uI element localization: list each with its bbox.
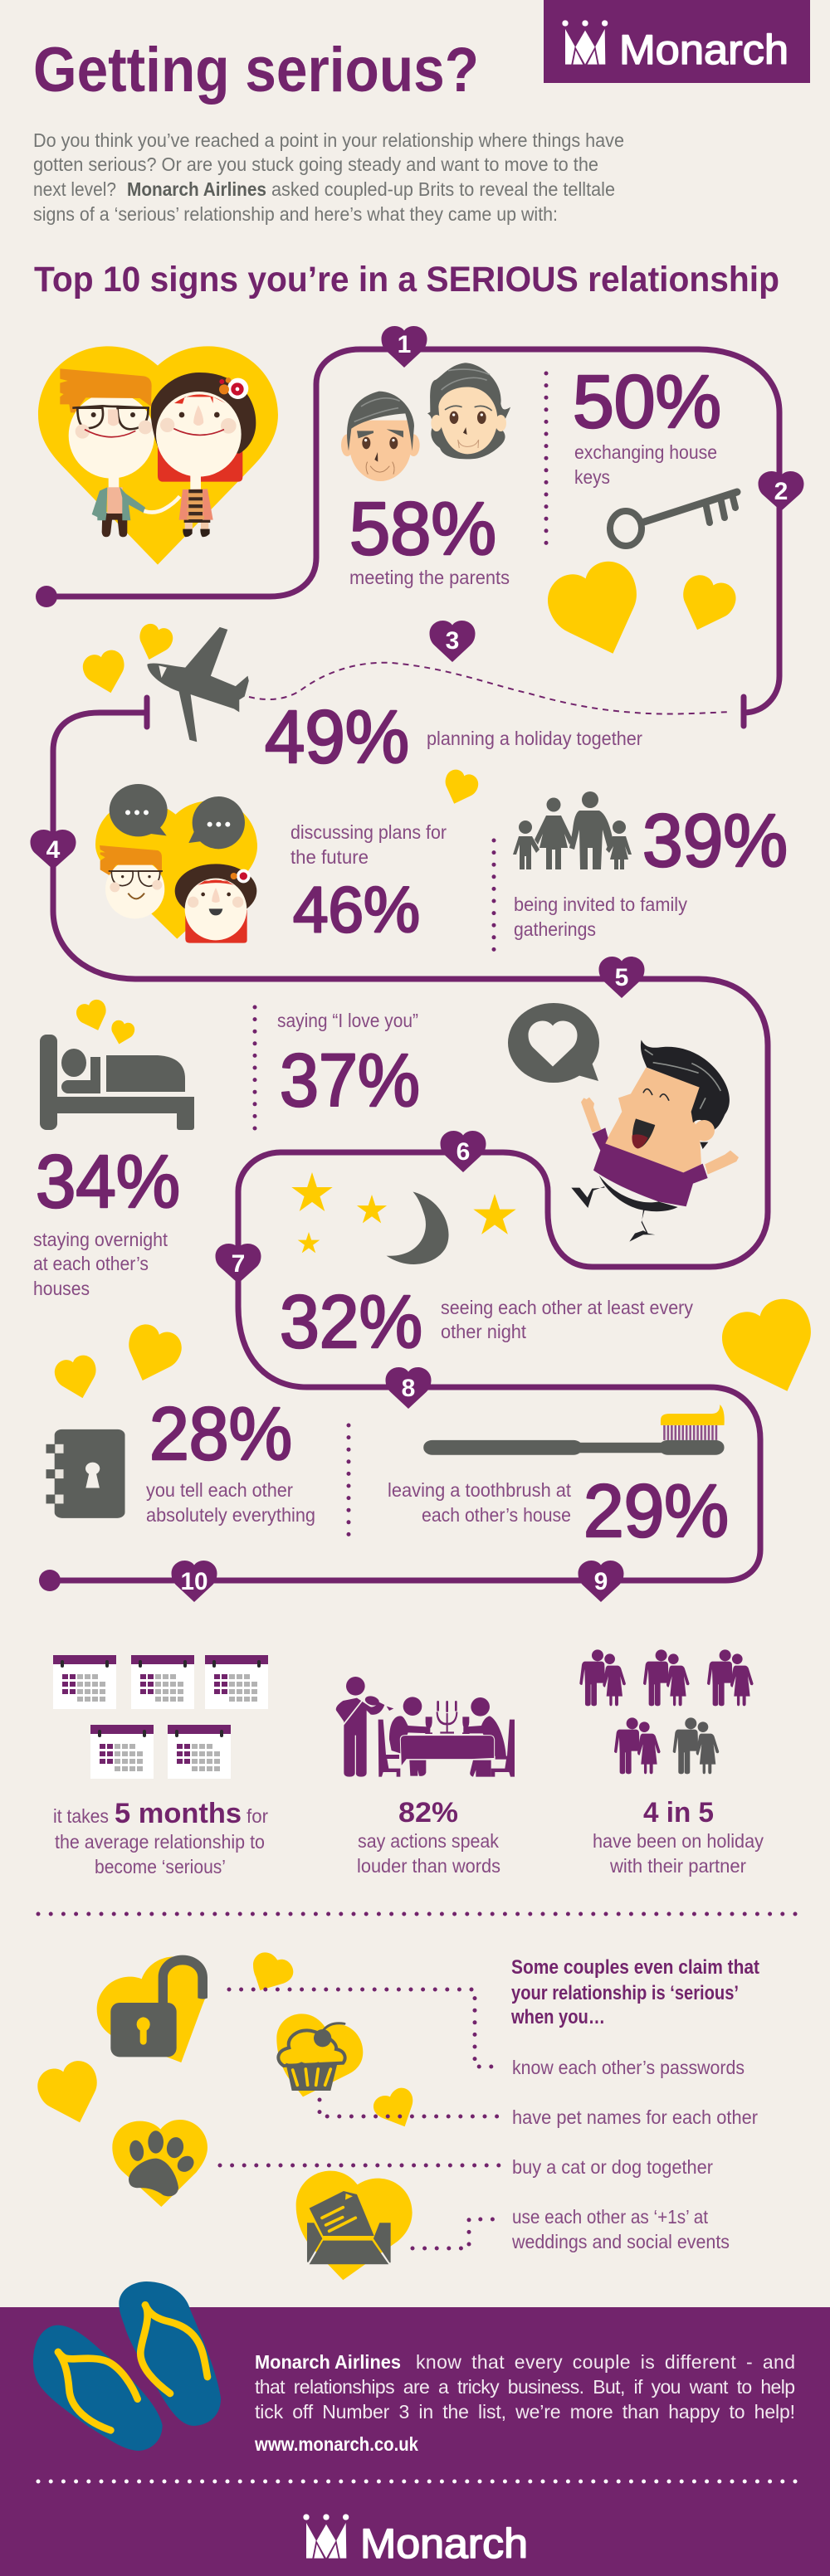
stat 5 months: the average relationship to (55, 1831, 265, 1853)
header logo: Monarch (619, 27, 788, 73)
heart marker 3 (430, 621, 475, 662)
yellow hearts near plane (80, 621, 176, 699)
stat 29% toothbrush: 29% (583, 1470, 729, 1553)
icon: notebook (46, 1429, 125, 1518)
intro text: next level? (33, 178, 116, 200)
illustration: couple in heart (38, 346, 278, 565)
heart marker 10 (171, 1561, 217, 1602)
intro text (33, 129, 624, 225)
divider dots (544, 373, 548, 551)
list items: have pet names for each other (512, 2106, 758, 2128)
list heading: your relationship is ‘serious’ (511, 1982, 739, 2004)
stat 46% discussing plans: 46% (293, 873, 420, 946)
yellow heart (438, 767, 481, 810)
heart marker 4: 4 (46, 836, 61, 864)
footer logo: Monarch (360, 2520, 528, 2567)
footer text: tick off Number 3 in the list, we’re more than happy to help! (255, 2401, 795, 2423)
intro text: gotten serious? Or are you stuck going steady and want to move to the (33, 153, 598, 175)
list items: use each other as ‘+1s’ at (512, 2206, 709, 2228)
icon: envelope on heart (296, 2171, 413, 2280)
stat 32% seeing each other (280, 1281, 693, 1364)
stat 32% seeing each other: 32% (280, 1281, 422, 1364)
list items: weddings and social events (511, 2231, 730, 2252)
footer text (254, 2351, 795, 2455)
yellow heart (253, 1952, 293, 1990)
heart marker 1: 1 (398, 331, 411, 358)
stat 4 in 5: 4 in 5 (643, 1797, 714, 1829)
intro text: Do you think you’ve reached a point in your relationship where things have (33, 129, 624, 151)
heart marker 5 (599, 957, 644, 998)
stat 50% exchanging house keys: exchanging house (574, 441, 717, 463)
heart marker 4 (30, 830, 76, 869)
subheading: Top 10 signs you’re in a SERIOUS relationship (34, 260, 779, 299)
stat 34% staying overnight: houses (33, 1278, 90, 1299)
heart marker 10: 10 (181, 1568, 208, 1595)
stat 49% planning a holiday: planning a holiday together (427, 728, 642, 749)
stat 29% toothbrush: each other’s house (422, 1504, 571, 1526)
illustration: jumping man (571, 1040, 739, 1242)
heart marker 8: 8 (402, 1375, 415, 1402)
heart marker 1 (382, 326, 427, 368)
list heading: when you… (510, 2006, 605, 2028)
stat 28% tell each other: absolutely everything (146, 1504, 315, 1526)
stat 39% family gatherings: 39% (642, 800, 788, 883)
stat 37% saying I love you (277, 1010, 420, 1122)
stat 28% tell each other: you tell each other (146, 1479, 293, 1501)
stat 37% saying I love you: saying “I love you” (277, 1010, 418, 1031)
heart marker 6 (440, 1131, 486, 1172)
stat 50% exchanging house keys: 50% (573, 361, 721, 444)
yellow hearts (51, 1292, 829, 1406)
stat 5 months (53, 1798, 268, 1877)
footer text: that relationships are a tricky business. But, if you want to help (255, 2376, 795, 2398)
stat 5 months: it takes (53, 1805, 109, 1827)
illustration: parents (341, 363, 510, 481)
stat 4 in 5 (593, 1797, 764, 1877)
footer panel (0, 2307, 830, 2576)
hearts and icons group (97, 1952, 413, 2280)
footer text: know that every couple is different - and (416, 2351, 795, 2373)
heart marker 5: 5 (615, 964, 628, 991)
list items (511, 2057, 758, 2252)
intro text: signs of a ‘serious’ relationship and here’s what they came up with: (33, 203, 558, 225)
stat 46% discussing plans: the future (290, 846, 369, 868)
list heading: Some couples even claim that (511, 1956, 759, 1979)
route end dot (39, 1570, 61, 1591)
icon: padlock on heart (97, 1955, 208, 2062)
list items: know each other’s passwords (512, 2057, 745, 2078)
stat 46% discussing plans (290, 821, 447, 946)
icon: key (610, 492, 737, 546)
stat 4 in 5: have been on holiday (593, 1830, 764, 1852)
stat 5 months: for (247, 1805, 268, 1827)
stat 39% family gatherings (514, 800, 788, 940)
heart marker 7 (216, 1244, 261, 1283)
stat 37% saying I love you: 37% (280, 1040, 420, 1122)
route line middle and lower (50, 698, 768, 1580)
stat 34% staying overnight (33, 1141, 180, 1299)
footer logo (303, 2514, 528, 2567)
title: Getting serious? (33, 35, 479, 105)
illustration: couple talking (95, 784, 257, 943)
route line upper (46, 349, 779, 726)
stat 29% toothbrush (388, 1470, 729, 1553)
icon: five calendars (53, 1655, 268, 1779)
stat 34% staying overnight: 34% (36, 1141, 180, 1224)
stat 39% family gatherings: gatherings (514, 918, 596, 940)
icon: plane (147, 627, 249, 742)
heart marker 9: 9 (594, 1568, 608, 1595)
stat 28% tell each other: 28% (149, 1393, 292, 1476)
stat 5 months: 5 months (115, 1798, 242, 1829)
heart marker 9 (578, 1561, 624, 1602)
stat 82%: louder than words (357, 1855, 500, 1877)
stat 29% toothbrush: leaving a toothbrush at (388, 1479, 572, 1501)
stat 32% seeing each other: seeing each other at least every (441, 1297, 693, 1318)
heart marker 7: 7 (232, 1250, 245, 1278)
heart marker 2 (759, 471, 803, 511)
intro text: asked coupled-up Brits to reveal the telltale (271, 178, 615, 200)
heart marker 3: 3 (446, 627, 459, 655)
icon: toothbrush (423, 1405, 725, 1455)
stat 82% (357, 1797, 500, 1877)
icon: bed (40, 1035, 194, 1130)
yellow hearts above bed (74, 997, 136, 1047)
icon: five couples, one grey (579, 1649, 754, 1774)
heart marker 6: 6 (456, 1138, 470, 1166)
stars and moon (291, 1172, 516, 1264)
icon: cupcake on heart (276, 2014, 363, 2096)
route start dot (36, 586, 57, 607)
list heading (510, 1956, 759, 2028)
footer text: www.monarch.co.uk (254, 2433, 418, 2455)
list items: buy a cat or dog together (512, 2156, 713, 2178)
divider dots (491, 840, 496, 950)
dotted connectors (220, 1989, 499, 2248)
icon: heart speech bubble (508, 1003, 599, 1083)
intro text: Monarch Airlines (127, 178, 266, 200)
stat 28% tell each other (146, 1393, 315, 1526)
footer text: Monarch Airlines (255, 2351, 401, 2373)
icon: paw on heart (112, 2120, 208, 2207)
stat 49% planning a holiday: 49% (265, 696, 409, 779)
icon: flip flops (33, 2281, 221, 2451)
heart marker 2: 2 (774, 478, 788, 505)
stat 34% staying overnight: at each other’s (33, 1253, 149, 1274)
dashed flight path (249, 663, 730, 714)
icon: romantic dinner with violinist (336, 1677, 515, 1777)
divider dots (252, 1007, 257, 1130)
stat 58% meeting the parents: meeting the parents (349, 567, 510, 588)
stat 58% meeting the parents: 58% (349, 488, 496, 571)
icon: family (513, 791, 632, 869)
stat 5 months: become ‘serious’ (95, 1856, 226, 1877)
stat 4 in 5: with their partner (609, 1855, 746, 1877)
stat 39% family gatherings: being invited to family (514, 894, 687, 915)
yellow heart (374, 2088, 413, 2126)
divider dots (347, 1425, 350, 1546)
divider dots (38, 2479, 804, 2484)
heart marker 8 (385, 1367, 432, 1409)
yellow heart (33, 2057, 108, 2131)
stat 82%: 82% (398, 1797, 458, 1829)
divider dots (38, 1911, 804, 1916)
stat 50% exchanging house keys (573, 361, 721, 488)
stat 49% planning a holiday (265, 696, 642, 779)
stat 82%: say actions speak (358, 1830, 499, 1852)
yellow hearts (540, 554, 740, 669)
stat 46% discussing plans: discussing plans for (290, 821, 447, 843)
stat 50% exchanging house keys: keys (574, 466, 610, 488)
stat 32% seeing each other: other night (441, 1321, 527, 1342)
header logo (544, 0, 810, 83)
stat 34% staying overnight: staying overnight (33, 1229, 168, 1250)
